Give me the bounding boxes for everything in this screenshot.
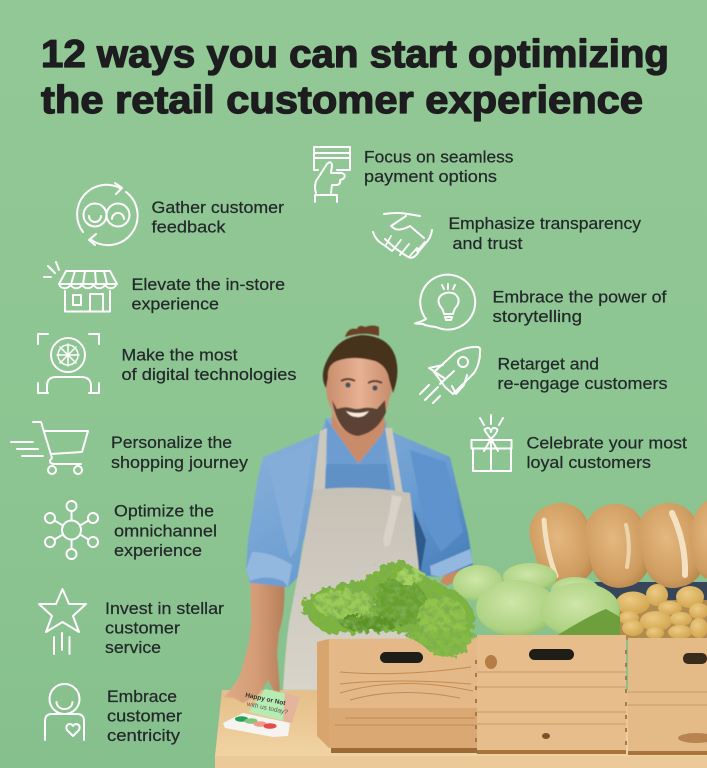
text: optimize the omnichannel experience bbox=[114, 502, 217, 560]
neck bbox=[330, 408, 386, 464]
text: embrace customer centricity: centricity bbox=[107, 727, 181, 745]
text: focus on seamless payment options bbox=[364, 148, 514, 186]
feedback device: with us today? bbox=[245, 701, 289, 716]
text: emphasize transparency and trust bbox=[448, 215, 642, 253]
dovetail joints bbox=[476, 650, 626, 750]
lettuce overhang bbox=[405, 629, 477, 657]
icon: star bbox=[39, 589, 86, 654]
text: emphasize transparency and trust: Emphasize transparency bbox=[448, 215, 642, 233]
text: retarget and re-engage customers bbox=[498, 356, 668, 393]
icon: rocket bbox=[420, 347, 480, 403]
man photo bbox=[224, 326, 473, 703]
apron tie bbox=[383, 495, 402, 547]
text: gather customer feedback: Gather customer bbox=[152, 199, 285, 217]
apron straps bbox=[313, 428, 403, 494]
left arm and hand bbox=[224, 578, 284, 703]
text: celebrate your most loyal customers bbox=[526, 434, 687, 472]
text: celebrate your most loyal customers: loyal customers bbox=[526, 454, 651, 472]
crate 2 bbox=[477, 635, 626, 750]
crate 3 bbox=[628, 638, 707, 751]
table bbox=[215, 690, 707, 768]
text: embrace the power of storytelling: Embrace the power of bbox=[492, 288, 667, 306]
text: personalize the shopping journey bbox=[111, 434, 249, 472]
shirt cuffs bbox=[246, 549, 473, 587]
text: optimize the omnichannel experience: omnichannel bbox=[114, 522, 217, 540]
text: personalize the shopping journey: shopping journey bbox=[111, 454, 249, 472]
title: the retail customer experience bbox=[41, 79, 643, 122]
text: make the most of digital technologies: Make the most bbox=[122, 346, 238, 364]
text: invest in stellar customer service bbox=[105, 600, 225, 657]
text: embrace customer centricity: customer bbox=[107, 708, 183, 726]
feedback device bbox=[223, 689, 300, 737]
apron bbox=[283, 488, 430, 690]
text: optimize the omnichannel experience: Optimize the bbox=[114, 502, 214, 520]
beard bbox=[332, 400, 386, 436]
text: make the most of digital technologies: of digital technologies bbox=[122, 366, 296, 384]
title bbox=[41, 33, 669, 122]
icon: gift box bbox=[472, 415, 512, 471]
crate 1 bbox=[317, 638, 477, 748]
text: embrace customer centricity bbox=[107, 688, 183, 745]
text: gather customer feedback: feedback bbox=[152, 218, 226, 236]
icon: card payment bbox=[314, 147, 350, 202]
head bbox=[326, 340, 394, 435]
cabbages bbox=[453, 563, 620, 637]
icon: handshake bbox=[373, 213, 432, 258]
text: elevate the in-store experience: experience bbox=[132, 296, 219, 314]
icon: feedback loop with faces bbox=[77, 183, 138, 245]
breads bbox=[522, 496, 707, 604]
icon: store bbox=[44, 262, 117, 312]
text: embrace the power of storytelling: storytelling bbox=[492, 308, 582, 326]
feedback device: Happy or Not bbox=[245, 692, 287, 707]
text: focus on seamless payment options: payment options bbox=[364, 168, 497, 186]
icon: omnichannel network bbox=[45, 501, 98, 559]
lettuce bbox=[300, 560, 476, 650]
text: elevate the in-store experience: Elevate the in-store bbox=[132, 276, 285, 294]
text: personalize the shopping journey: Personalize the bbox=[111, 434, 232, 452]
potatoes bbox=[616, 584, 707, 640]
text: embrace customer centricity: Embrace bbox=[107, 688, 177, 706]
text: gather customer feedback bbox=[152, 199, 285, 236]
hair bbox=[323, 335, 397, 393]
text: emphasize transparency and trust: and trust bbox=[452, 235, 523, 253]
text: make the most of digital technologies bbox=[122, 346, 296, 384]
text: retarget and re-engage customers: Retarget and bbox=[498, 356, 599, 374]
title: 12 ways you can start optimizing bbox=[41, 33, 669, 76]
icon: speech bubble with light bulb bbox=[415, 275, 475, 330]
text: optimize the omnichannel experience: experience bbox=[114, 542, 202, 560]
shirt bbox=[246, 418, 473, 587]
text: embrace the power of storytelling bbox=[492, 288, 667, 326]
text: elevate the in-store experience bbox=[132, 276, 285, 314]
wooden crates bbox=[317, 629, 707, 755]
icon: person with heart bbox=[45, 684, 84, 740]
icon: shopping cart bbox=[11, 422, 88, 474]
right hand bbox=[440, 569, 463, 586]
open collar and placket bbox=[325, 418, 387, 467]
text: retarget and re-engage customers: re-engage customers bbox=[498, 375, 668, 393]
text: invest in stellar customer service: Invest in stellar bbox=[105, 600, 225, 618]
text: invest in stellar customer service: customer bbox=[105, 620, 181, 638]
icon: digital technologies bbox=[38, 334, 99, 393]
text: celebrate your most loyal customers: Celebrate your most bbox=[526, 434, 687, 452]
text: focus on seamless payment options: Focus on seamless bbox=[364, 148, 514, 166]
text: invest in stellar customer service: service bbox=[105, 639, 161, 657]
eyes bbox=[345, 382, 351, 388]
